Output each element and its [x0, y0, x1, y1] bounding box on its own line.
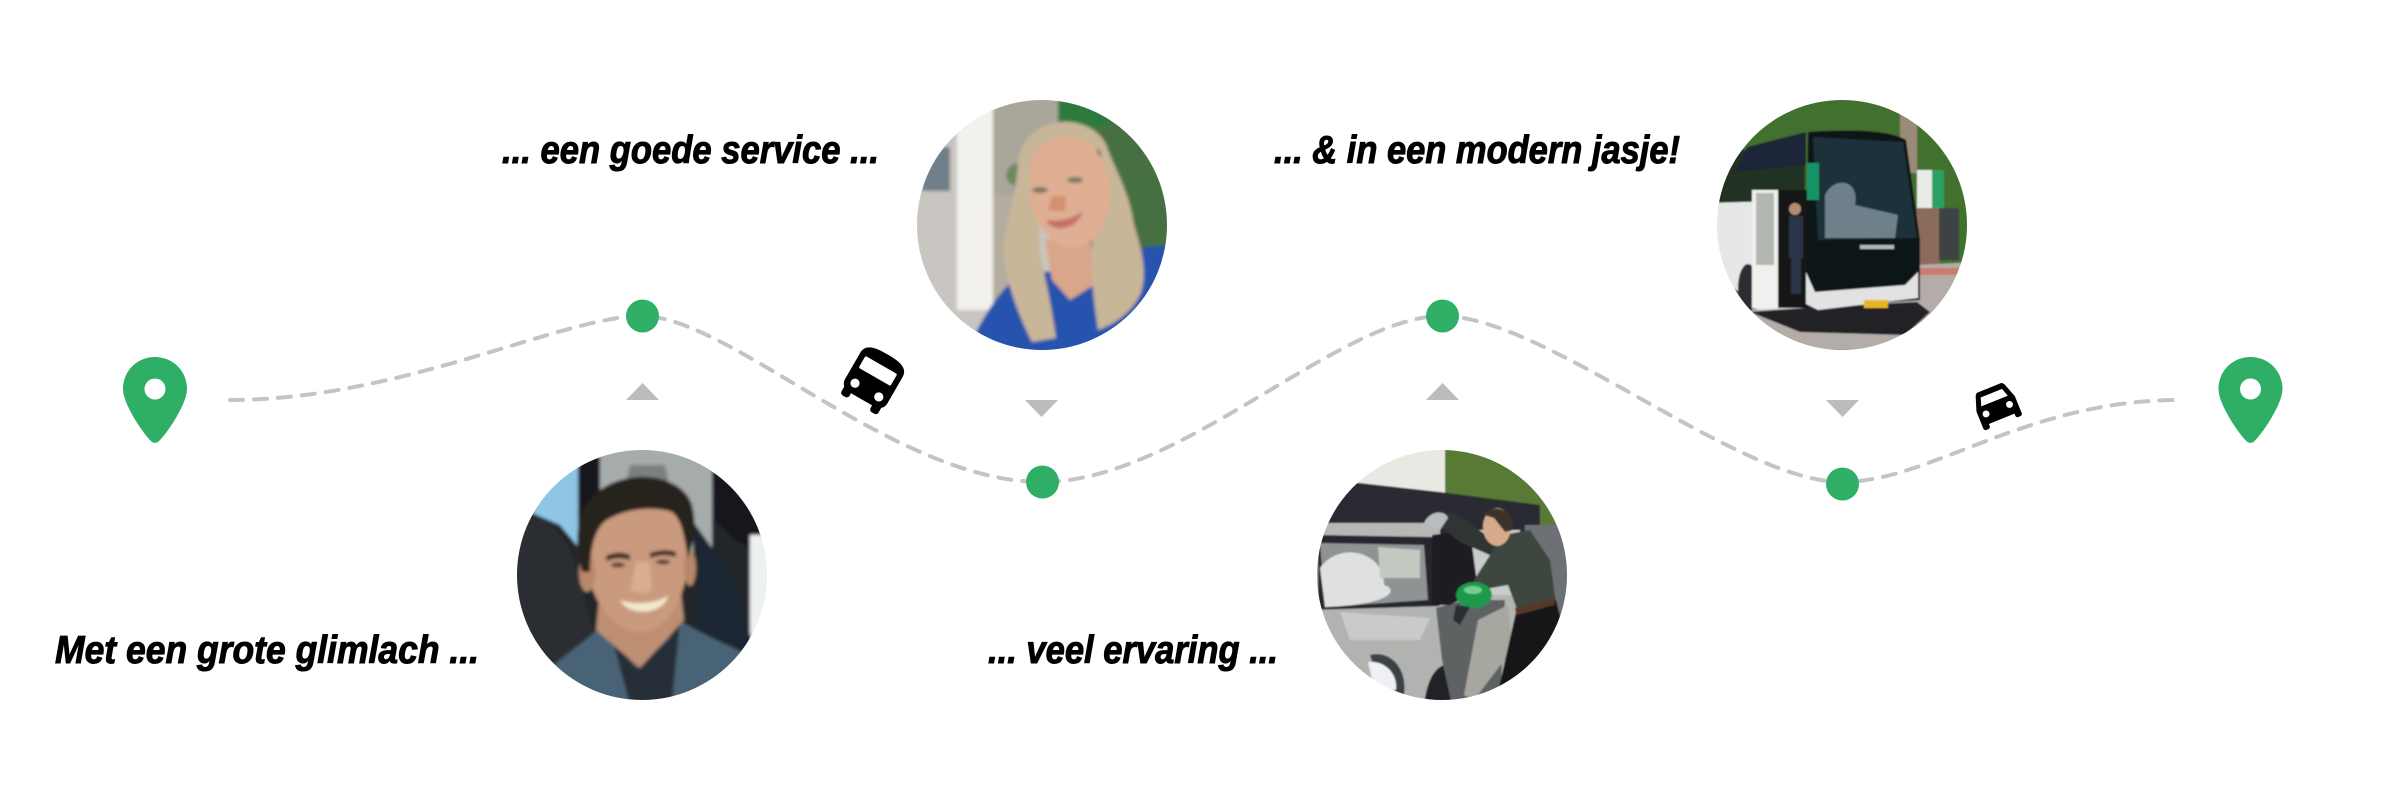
text: service: ... een goede service ... — [502, 129, 879, 172]
photo: coach bus — [1710, 95, 1975, 355]
text: modern jasje: ... & in een modern jasje! — [1274, 129, 1680, 172]
photo: smiling driver — [517, 450, 767, 700]
icon: car — [1970, 380, 2023, 431]
dashed route line — [230, 316, 2179, 482]
route stop dots — [626, 300, 1859, 500]
photo: smiling woman — [910, 95, 1175, 355]
icon: finish location pin — [2218, 357, 2282, 443]
icon: start location pin — [123, 357, 187, 443]
text: glimlach: Met een grote glimlach ... — [55, 629, 479, 672]
pointer triangles — [626, 383, 1859, 417]
icon: bus — [837, 342, 909, 417]
photo: man leaning on car — [1310, 445, 1575, 705]
text: ervaring: ... veel ervaring ... — [988, 629, 1278, 672]
